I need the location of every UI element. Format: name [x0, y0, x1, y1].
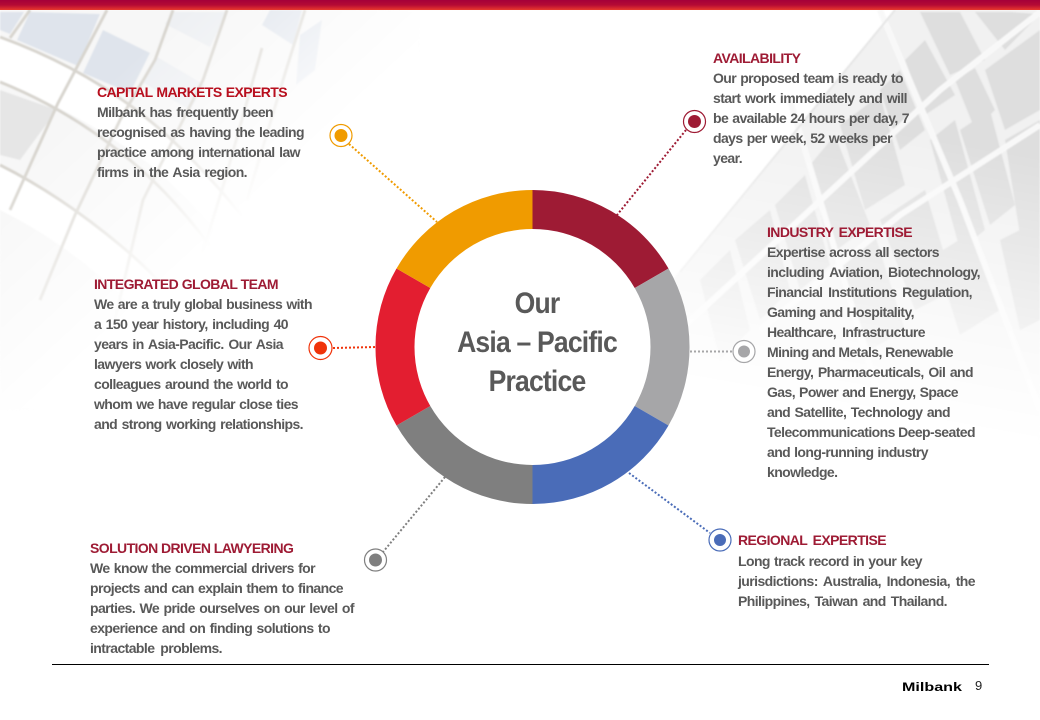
text block: integrated global team: colleagues around the world to — [94, 376, 288, 392]
text block: industry expertise: Healthcare, Infrastructure — [767, 324, 925, 340]
text block: integrated global team: INTEGRATED GLOBAL TEAM — [94, 276, 278, 292]
segment: integrated global team — [375, 268, 430, 426]
text block: availability: days per week, 52 weeks per — [713, 130, 892, 146]
text block: integrated global team: and strong working relationships. — [94, 416, 303, 432]
text block: availability: be available 24 hours per day, 7 — [713, 110, 909, 126]
text block: industry expertise: and Satellite, Technology and — [767, 404, 950, 420]
page number: 9 — [975, 678, 982, 693]
text block: availability — [713, 50, 909, 166]
text block: availability: year. — [713, 150, 742, 166]
center title: Asia – Pacific — [457, 326, 617, 359]
text block: industry expertise: Energy, Pharmaceuticals, Oil and — [767, 364, 973, 380]
text block: capital markets experts: recognised as having the leading — [97, 124, 304, 140]
footer rule — [52, 664, 989, 665]
segment: solution driven lawyering — [396, 406, 532, 504]
text block: industry expertise — [767, 224, 980, 480]
segment: capital markets — [396, 190, 532, 288]
text block: industry expertise: Gas, Power and Energy, Space — [767, 384, 958, 400]
footer logo: Milbank: Milbank — [902, 682, 962, 694]
text block: industry expertise: knowledge. — [767, 464, 837, 480]
text block: availability: AVAILABILITY — [713, 50, 800, 66]
center title: Our — [515, 287, 559, 320]
text block: integrated global team: whom we have regular close ties — [94, 396, 298, 412]
text block: integrated global team: We are a truly global business with — [94, 296, 312, 312]
text block: capital markets experts: CAPITAL MARKETS EXPERTS — [97, 84, 287, 100]
text block: industry expertise: INDUSTRY EXPERTISE — [767, 224, 912, 240]
text block: regional expertise: Philippines, Taiwan and Thailand. — [738, 593, 947, 609]
text block: integrated global team: a 150 year history, including 40 — [94, 316, 288, 332]
text block: solution driven lawyering — [90, 540, 355, 656]
text block: solution driven lawyering: intractable problems. — [90, 640, 222, 656]
text block: solution driven lawyering: parties. We pride ourselves on our level of — [90, 600, 354, 616]
segment: availability — [532, 190, 668, 288]
segment: regional expertise — [532, 406, 668, 504]
text block: availability: Our proposed team is ready to — [713, 70, 903, 86]
text block: solution driven lawyering: projects and can explain them to finance — [90, 580, 343, 596]
text block: regional expertise: REGIONAL EXPERTISE — [738, 532, 886, 548]
text block: regional expertise: Long track record in your key — [738, 553, 922, 569]
text block: regional expertise — [738, 532, 976, 609]
text block: industry expertise: including Aviation, Biotechnology, — [767, 264, 980, 280]
text block: regional expertise: jurisdictions: Australia, Indonesia, the — [738, 573, 975, 589]
text block: integrated global team: lawyers work closely with — [94, 356, 253, 372]
center title — [457, 287, 617, 398]
text block: industry expertise: Telecommunications Deep-seated — [767, 424, 975, 440]
text block: capital markets experts: firms in the Asia region. — [97, 164, 247, 180]
text block: industry expertise: Expertise across all sectors — [767, 244, 939, 260]
text block: solution driven lawyering: SOLUTION DRIVEN LAWYERING — [90, 540, 293, 556]
center title: Practice — [489, 365, 585, 398]
text block: industry expertise: Mining and Metals, Renewable — [767, 344, 953, 360]
top red bar — [0, 0, 1040, 10]
text block: industry expertise: Gaming and Hospitality, — [767, 304, 914, 320]
segment: industry expertise — [635, 268, 690, 426]
text block: capital markets experts: Milbank has frequently been — [97, 104, 273, 120]
text block: solution driven lawyering: We know the commercial drivers for — [90, 560, 315, 576]
text block: capital markets experts: practice among international law — [97, 144, 300, 160]
background: building photographs — [0, 10, 1040, 344]
text block: solution driven lawyering: experience and on finding solutions to — [90, 620, 330, 636]
text block: integrated global team — [94, 276, 312, 432]
text block: availability: start work immediately and will — [713, 90, 907, 106]
text block: integrated global team: years in Asia-Pacific. Our Asia — [94, 336, 283, 352]
text block: capital markets experts — [97, 84, 304, 180]
text block: industry expertise: and long-running industry — [767, 444, 928, 460]
text block: industry expertise: Financial Institutions Regulation, — [767, 284, 972, 300]
